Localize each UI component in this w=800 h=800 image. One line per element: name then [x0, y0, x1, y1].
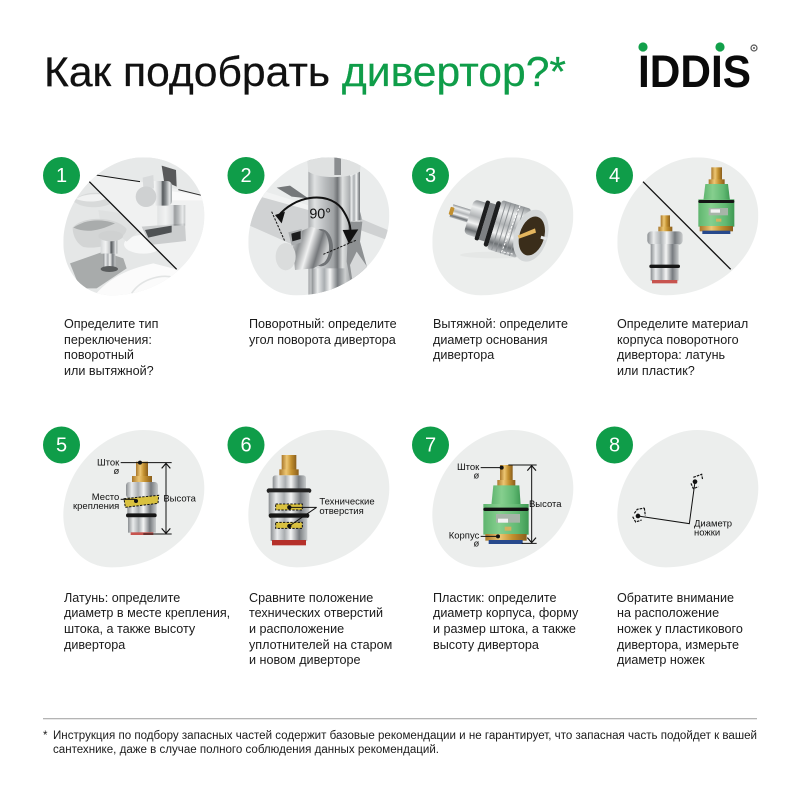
badge: 3: 3 [425, 165, 436, 187]
panel: step 3 [430, 153, 577, 300]
text: step 8: дивертора, измерьте [617, 638, 739, 652]
badge: 6: 6 [240, 434, 252, 456]
divider line [89, 182, 177, 269]
footer rule [43, 718, 757, 719]
badge: 4 [596, 157, 633, 194]
illustration: rotary diverter [247, 153, 393, 300]
logo: IDDIS: IDDIS [638, 46, 751, 97]
badge: 3 [412, 157, 449, 194]
label: ножки [694, 528, 720, 539]
text: step 6: уплотнителей на старом [249, 638, 392, 652]
labels: ø [474, 539, 480, 550]
blob [617, 430, 758, 567]
text: step 8: Обратите внимание [617, 591, 734, 605]
text: step 7: диаметр корпуса, форму [433, 606, 579, 620]
text: step 4: корпуса поворотного [617, 333, 739, 347]
text: step 8: диаметр ножек [617, 653, 705, 667]
panel: step 4 [618, 158, 758, 296]
text: step 4: дивертора: латунь [617, 348, 726, 362]
label: 90 degrees: 90° [309, 206, 331, 222]
text: step 6: и расположение [249, 622, 344, 636]
labels: Шток [457, 462, 480, 473]
panel: step 5 [63, 430, 204, 567]
illustration: technical holes [248, 430, 389, 567]
measurement lines [481, 465, 537, 543]
text: step 7: и размер штока, а также [433, 622, 576, 636]
badge: 5: 5 [56, 434, 67, 456]
panel: step 7 [432, 430, 573, 567]
labels: Корпус [449, 530, 480, 541]
labels: Шток [97, 458, 120, 469]
label: Диаметр [694, 519, 732, 530]
footnote [43, 730, 757, 756]
text: step 2: угол поворота дивертора [249, 333, 396, 347]
badge: 2: 2 [240, 165, 252, 187]
text: step 5: штока, а также высоту [64, 622, 196, 636]
title: Как подобрать дивертор?* [44, 48, 566, 95]
labels: Высота [163, 493, 197, 504]
text: step 1: поворотный [64, 348, 134, 362]
badge: 8 [596, 426, 633, 464]
badge: 5 [43, 426, 80, 464]
text: step 6: и новом диверторе [249, 653, 361, 667]
illustration: brass and plastic [618, 158, 758, 296]
labels: Место [92, 492, 119, 503]
badge: 2 [228, 157, 264, 194]
label [694, 519, 732, 539]
text: step 3: дивертора [433, 348, 494, 362]
text: step 3: Вытяжной: определите [433, 317, 568, 331]
badge: 4: 4 [609, 165, 620, 187]
panel: step 2 [247, 153, 393, 300]
text: step 4: или пластик? [617, 364, 695, 378]
panel: step 6 [248, 430, 389, 567]
label: Технические [319, 497, 375, 508]
label [319, 497, 375, 517]
badge: 1: 1 [56, 165, 67, 187]
divider line [643, 182, 731, 269]
illustration: plastic diverter [432, 430, 573, 567]
illustration: pull-out diverter [430, 153, 577, 300]
text: step 8: на расположение [617, 606, 719, 620]
illustration: brass diverter [63, 430, 204, 567]
text: step 5: дивертора [64, 638, 125, 652]
text: step 1: Определите тип [64, 317, 158, 331]
badge: 6 [228, 426, 264, 464]
text: step 5: Латунь: определите [64, 591, 180, 605]
badge: 8: 8 [609, 434, 620, 456]
panel: step 8 [617, 430, 758, 567]
footnote: * [43, 730, 48, 742]
text: step 4: Определите материал [617, 317, 748, 331]
footnote: сантехнике, даже в случае полного соблюдения данных рекомендаций. [53, 744, 439, 756]
text: step 1: или вытяжной? [64, 364, 154, 378]
labels: ø [114, 466, 120, 477]
text: step 5: диаметр в месте крепления, [64, 606, 230, 620]
text: step 2: Поворотный: определите [249, 317, 397, 331]
text: step 8: ножек у пластикового [617, 622, 743, 636]
labels: ø [474, 470, 480, 481]
footnote: Инструкция по подбору запасных частей содержит базовые рекомендации и не гарантирует, что запасная часть подойдет к вашей [53, 730, 757, 742]
text: step 3: диаметр основания [433, 333, 548, 347]
labels: крепления [73, 501, 119, 512]
labels: Высота [529, 499, 562, 510]
text: step 7: Пластик: определите [433, 591, 557, 605]
text: step 6: Сравните положение [249, 591, 373, 605]
label: отверстия [319, 506, 364, 517]
labels [449, 462, 562, 550]
text: step 1: переключения: [64, 333, 152, 347]
badge: 7 [412, 426, 449, 464]
panel: step 1 [64, 158, 204, 296]
leg diagram [633, 474, 703, 524]
labels [73, 458, 197, 512]
text: step 6: технических отверстий [249, 606, 383, 620]
badge: 1 [43, 157, 80, 194]
text: step 7: высоту дивертора [433, 638, 539, 652]
badge: 7: 7 [425, 434, 436, 456]
illustration: switch types [64, 158, 204, 296]
measurement lines [121, 463, 172, 534]
pointer lines [288, 506, 317, 528]
90 degree arc arrow [272, 198, 358, 254]
